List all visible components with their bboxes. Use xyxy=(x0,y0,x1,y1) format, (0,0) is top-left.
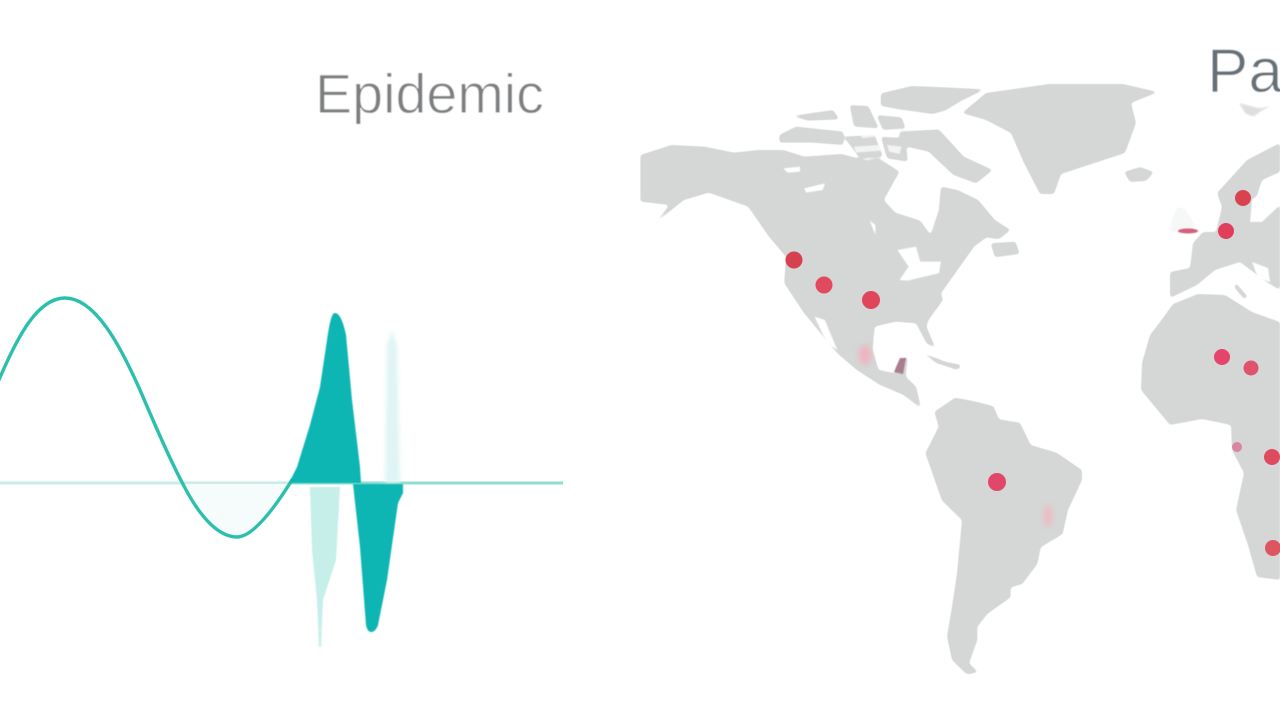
Europe xyxy=(1170,143,1280,298)
wave line xyxy=(0,298,292,537)
pin: northern Europe xyxy=(1235,190,1251,206)
pin: faded Central America xyxy=(894,358,906,374)
filled spike down xyxy=(353,484,403,632)
pin: south-west USA xyxy=(816,276,832,294)
Svalbard xyxy=(1236,101,1279,118)
pin: faded west Africa xyxy=(1232,442,1242,452)
pin: western Europe xyxy=(1218,223,1234,239)
baseline xyxy=(0,482,290,484)
faded spike up xyxy=(385,330,400,483)
pin: north-west Africa xyxy=(1214,349,1230,365)
Arctic islands xyxy=(881,86,984,114)
land masses xyxy=(640,84,1280,674)
world map xyxy=(640,84,1280,674)
North America xyxy=(640,86,1020,408)
pin: Brazil xyxy=(988,473,1006,491)
Great Lakes and lakes xyxy=(783,132,941,350)
filled spike up xyxy=(289,313,361,483)
pin: north Africa xyxy=(1244,360,1258,376)
South America xyxy=(925,398,1082,674)
pin: western North America xyxy=(786,252,802,268)
Arctic channels xyxy=(854,145,881,153)
inland water xyxy=(783,132,1280,350)
wave trough tint xyxy=(185,484,290,537)
Africa xyxy=(1141,294,1280,580)
pin: faded British Isles xyxy=(1178,228,1198,234)
heading: Epidemic: Epidemic xyxy=(315,62,544,125)
pin: faded eastern Brazil xyxy=(1044,505,1052,527)
UK and Ireland xyxy=(1167,205,1200,235)
pin: faded Mexico xyxy=(859,345,871,365)
Adriatic xyxy=(1252,262,1270,282)
Greenland xyxy=(962,84,1158,194)
faded spike down xyxy=(310,487,340,647)
Baltic xyxy=(1250,175,1280,222)
pin: central Africa xyxy=(1264,449,1280,465)
Iceland xyxy=(1124,167,1154,182)
pin: southern Africa xyxy=(1265,540,1280,556)
chart: epidemic wave xyxy=(0,298,563,647)
Italy xyxy=(1234,283,1248,299)
pin: southern USA xyxy=(862,291,880,309)
